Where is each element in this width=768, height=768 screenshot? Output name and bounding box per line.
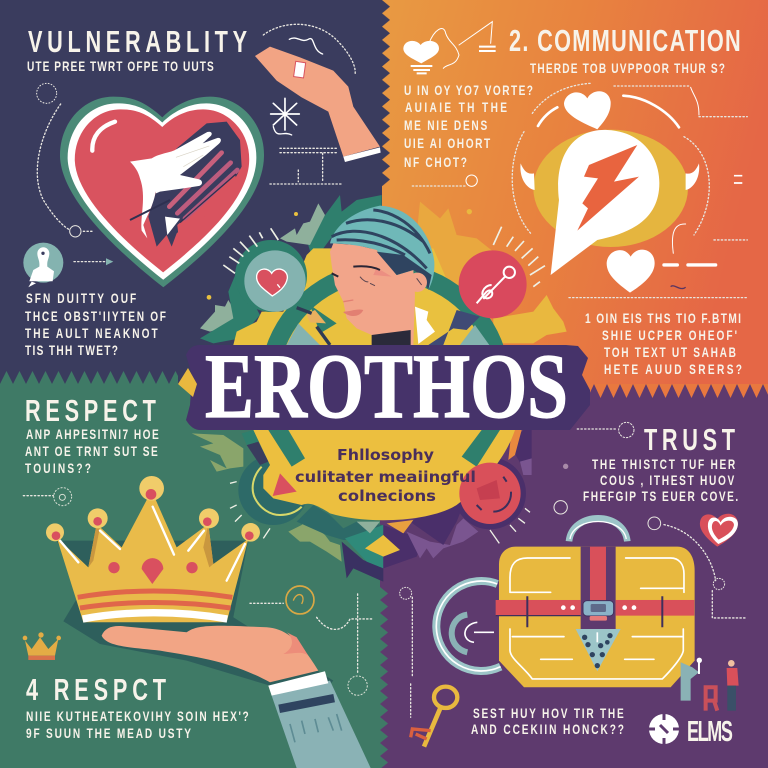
icon: crown on open hand <box>46 476 371 768</box>
heading: trust: TRUST <box>644 422 736 457</box>
icon: small crown <box>23 632 61 660</box>
text block: communication right: 1 OIN EIS THS TIO F.BTMI <box>585 311 741 326</box>
heading: vulnerability: VULNERABLITY <box>28 24 247 59</box>
text block: respect intro: ANP AHPESITNI7 HOE <box>26 427 159 442</box>
icon: symbol badge <box>459 250 527 318</box>
text block: vulnerability body: THE AULT NEAKNOT <box>25 326 158 341</box>
tagline: culitater meaiingful <box>295 468 476 486</box>
decorative dotted paths <box>400 422 746 717</box>
tagline: colnecions <box>338 487 436 505</box>
text block: trust intro <box>583 457 738 504</box>
text block: vulnerability body <box>25 291 166 358</box>
text block: communication left: NF CHOT? <box>404 155 467 170</box>
tagline: Fhllosophy <box>337 446 434 464</box>
icon: gold key <box>411 687 457 747</box>
text block: trust question: SEST HUY HOV TIR THE <box>473 706 624 721</box>
icon: heart with gloved hand <box>60 97 264 287</box>
logo: elms <box>649 714 733 748</box>
text block: trust intro: COUS , ITHEST HUOV <box>600 473 734 488</box>
text block: trust question <box>471 706 624 737</box>
text block: respect outro: NIIE KUTHEATEKOVIHY SOIN HEX'? <box>26 709 249 724</box>
text block: trust question: AND CCEKIIN HONCK?? <box>471 722 624 737</box>
panel: vulnerability <box>23 24 381 358</box>
logo: elms: ELMS <box>687 716 733 748</box>
panel: communication <box>403 22 747 377</box>
text block: respect outro <box>26 709 249 741</box>
text block: respect intro <box>25 427 159 476</box>
text block: communication right: SHIE UCPER OHEOF' <box>602 328 737 343</box>
text block: communication left <box>404 83 533 170</box>
radiating ticks <box>207 209 545 300</box>
text block: communication right: TOH TEXT UT SAHAB <box>604 345 736 360</box>
icon: person portrait <box>330 206 435 345</box>
text block: trust intro: FHEFGIP TS EUER COVE. <box>583 489 738 504</box>
central illustration <box>178 195 590 582</box>
lower medallion <box>192 430 532 582</box>
text block: communication left: AUIAIE TH THE <box>405 100 507 115</box>
panel: respect <box>23 393 372 768</box>
title banner <box>178 335 590 437</box>
text block: respect outro: 9F SUUN THE MEAD USTY <box>26 726 191 741</box>
text block: communication right <box>585 311 742 377</box>
heading: communication: 2. COMMUNICATION <box>509 23 741 58</box>
icon: heart badge <box>235 240 307 312</box>
tagline <box>295 446 476 505</box>
text block: vulnerability body: TIS THH TWET? <box>25 343 118 358</box>
icon: locked treasure chest <box>436 518 695 687</box>
text block: respect intro: TOUINS?? <box>25 461 91 476</box>
upper bursts and yellow field <box>200 195 567 352</box>
subheading: vulnerability: UTE PREE TWRT OFPE TO UUTS <box>27 59 214 74</box>
icon: heart <box>700 514 738 547</box>
heading: respect: RESPECT <box>25 393 156 428</box>
text block: vulnerability body: THCE OBST'IIYTEN OF <box>25 309 166 324</box>
decorative dotted paths and sparkle <box>23 24 355 287</box>
icon: heart light bulb <box>403 22 496 73</box>
subheading: communication: THERDE TOB UVPPOOR THUR S? <box>530 61 725 76</box>
text block: communication right: HETE AUUD SRERS? <box>604 362 742 377</box>
title text: EROTHOS <box>205 335 568 437</box>
panel: trust <box>400 422 746 748</box>
icon: small people <box>681 658 739 711</box>
icon: reaching hand <box>255 47 381 162</box>
text block: trust intro: THE THISTCT TUF HER <box>592 457 736 472</box>
text block: respect intro: ANT OE TRNT SUT SE <box>25 444 158 459</box>
text block: communication left: UIE AI OHORT <box>404 136 491 151</box>
heading: 4 respect: 4 RESPCT <box>26 672 167 707</box>
text block: communication left: ME NIE DENS <box>404 118 487 133</box>
icon: speech bubble with lightning <box>412 83 747 298</box>
text block: communication left: U IN OY YO7 VORTE? <box>404 83 533 98</box>
decorative dotted paths <box>23 488 372 695</box>
text block: vulnerability body: SFN DUITTY OUF <box>26 291 136 306</box>
